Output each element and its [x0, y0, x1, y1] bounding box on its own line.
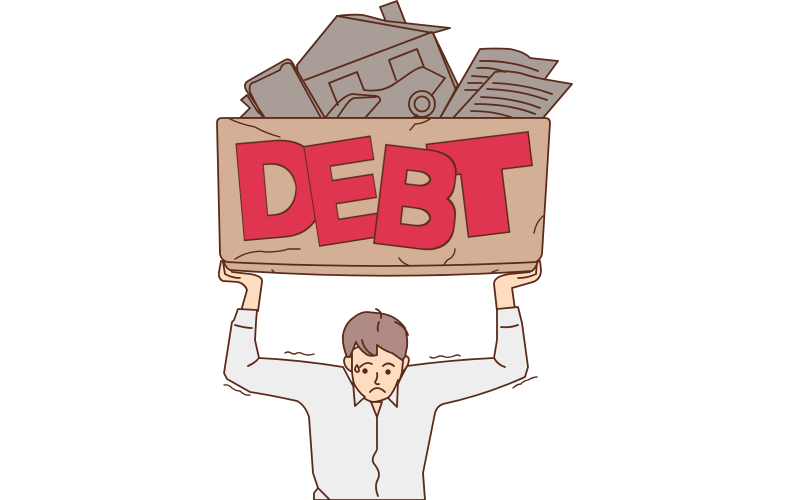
icon: car [325, 67, 445, 118]
shirt placket [373, 417, 379, 496]
right hand [494, 261, 541, 311]
letter D: D [230, 115, 329, 264]
nose and mouth [370, 373, 385, 392]
sweat drop [355, 365, 359, 372]
head [343, 309, 409, 402]
eyes and brows [360, 363, 394, 374]
left hand [219, 261, 262, 311]
debt box [217, 113, 550, 277]
icon: house [297, 1, 458, 118]
letter T: T [434, 121, 532, 253]
face [352, 335, 404, 402]
hair strands [362, 309, 408, 355]
icon: papers [440, 48, 572, 118]
shirt [224, 307, 528, 500]
letter E: E [296, 113, 393, 272]
strain marks [224, 352, 537, 395]
collar [353, 380, 398, 417]
box contents: house, car, phone, papers [240, 1, 572, 118]
icon: phone [240, 59, 325, 118]
DEBT lettering [230, 113, 532, 277]
man's body and shirt [224, 307, 528, 500]
letter B: B [367, 121, 467, 277]
box cracks [230, 119, 543, 272]
ears [344, 355, 352, 372]
shirt sleeve details [235, 325, 518, 500]
hair [343, 312, 407, 360]
box front [217, 118, 550, 266]
box lower lip [223, 258, 538, 276]
